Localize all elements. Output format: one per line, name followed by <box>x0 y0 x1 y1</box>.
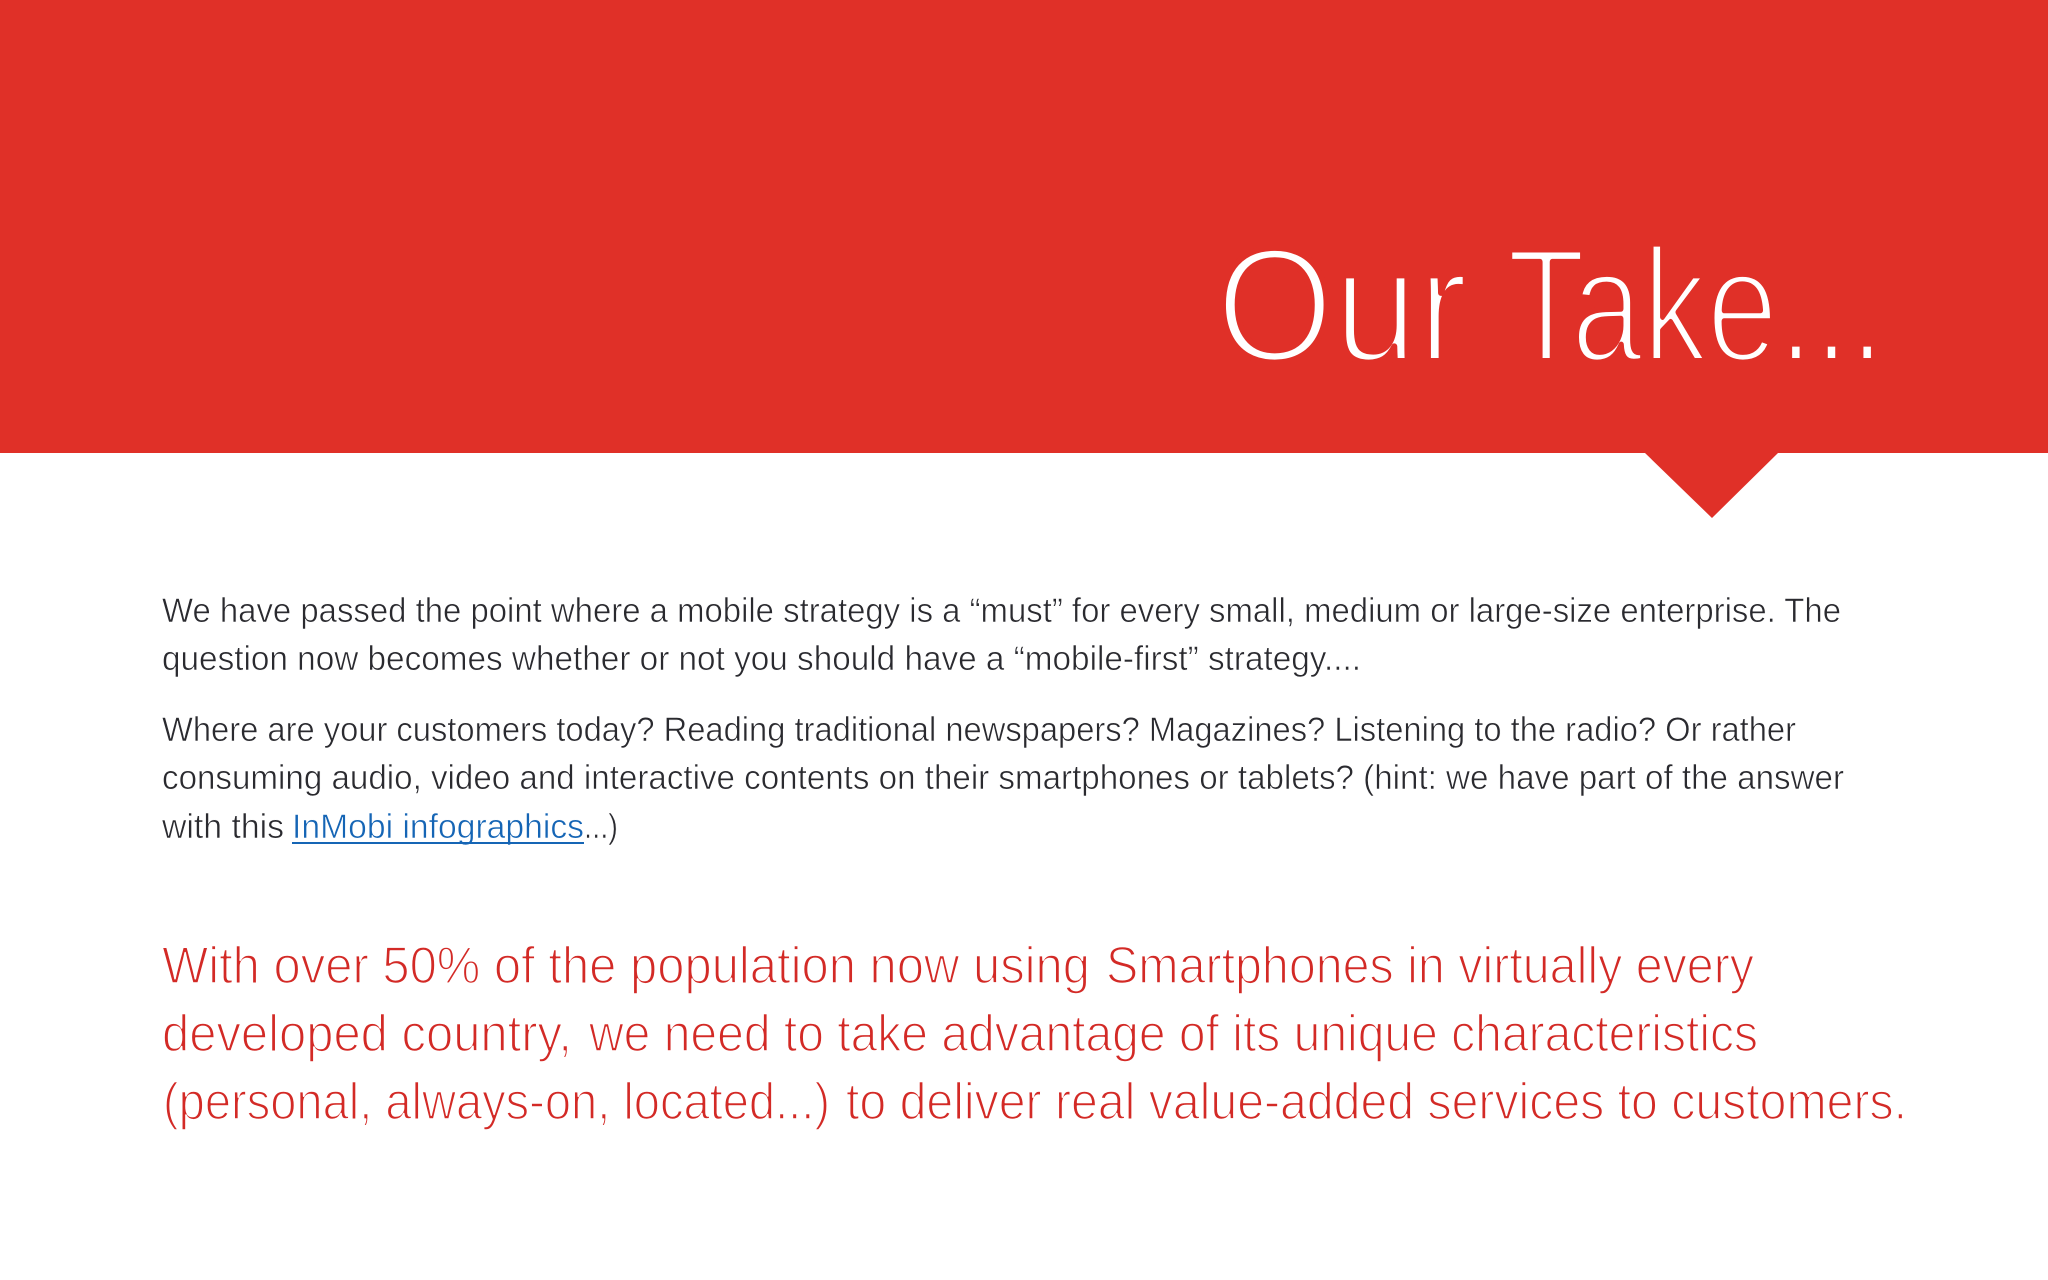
red callout statement: we need to take advantage of its unique characteristics <box>588 1005 1758 1063</box>
intro paragraph <box>162 592 1841 678</box>
question paragraph <box>161 711 1844 846</box>
red callout statement <box>162 937 1907 1131</box>
question paragraph: with this <box>161 808 284 846</box>
red callout statement: (personal, always-on, located...) <box>163 1073 830 1131</box>
intro paragraph: question now becomes whether or not you should have a “mobile-first” strategy.... <box>162 640 1361 678</box>
header banner with pointer <box>0 0 2048 518</box>
red callout statement: Smartphones in virtually every <box>1106 937 1754 995</box>
red callout statement: to deliver real value-added services to customers. <box>846 1073 1907 1131</box>
red callout statement: developed country, <box>162 1005 572 1063</box>
question paragraph: ...) <box>584 808 618 846</box>
title: Take... <box>1507 215 1885 396</box>
question paragraph: Where are your customers today? Reading traditional newspapers? Magazines? Listening to the radio? Or rather <box>162 711 1796 749</box>
question paragraph: InMobi infographics <box>292 808 584 846</box>
intro paragraph: We have passed the point where a mobile strategy is a “must” for every small, medium or large-size enterprise. The <box>162 592 1841 630</box>
red callout statement: With over 50% of the population now using <box>162 937 1090 995</box>
title <box>1216 215 1885 396</box>
question paragraph: consuming audio, video and interactive contents on their smartphones or tablets? (hint: we have part of the answer <box>162 759 1844 797</box>
title: Our <box>1216 215 1468 396</box>
